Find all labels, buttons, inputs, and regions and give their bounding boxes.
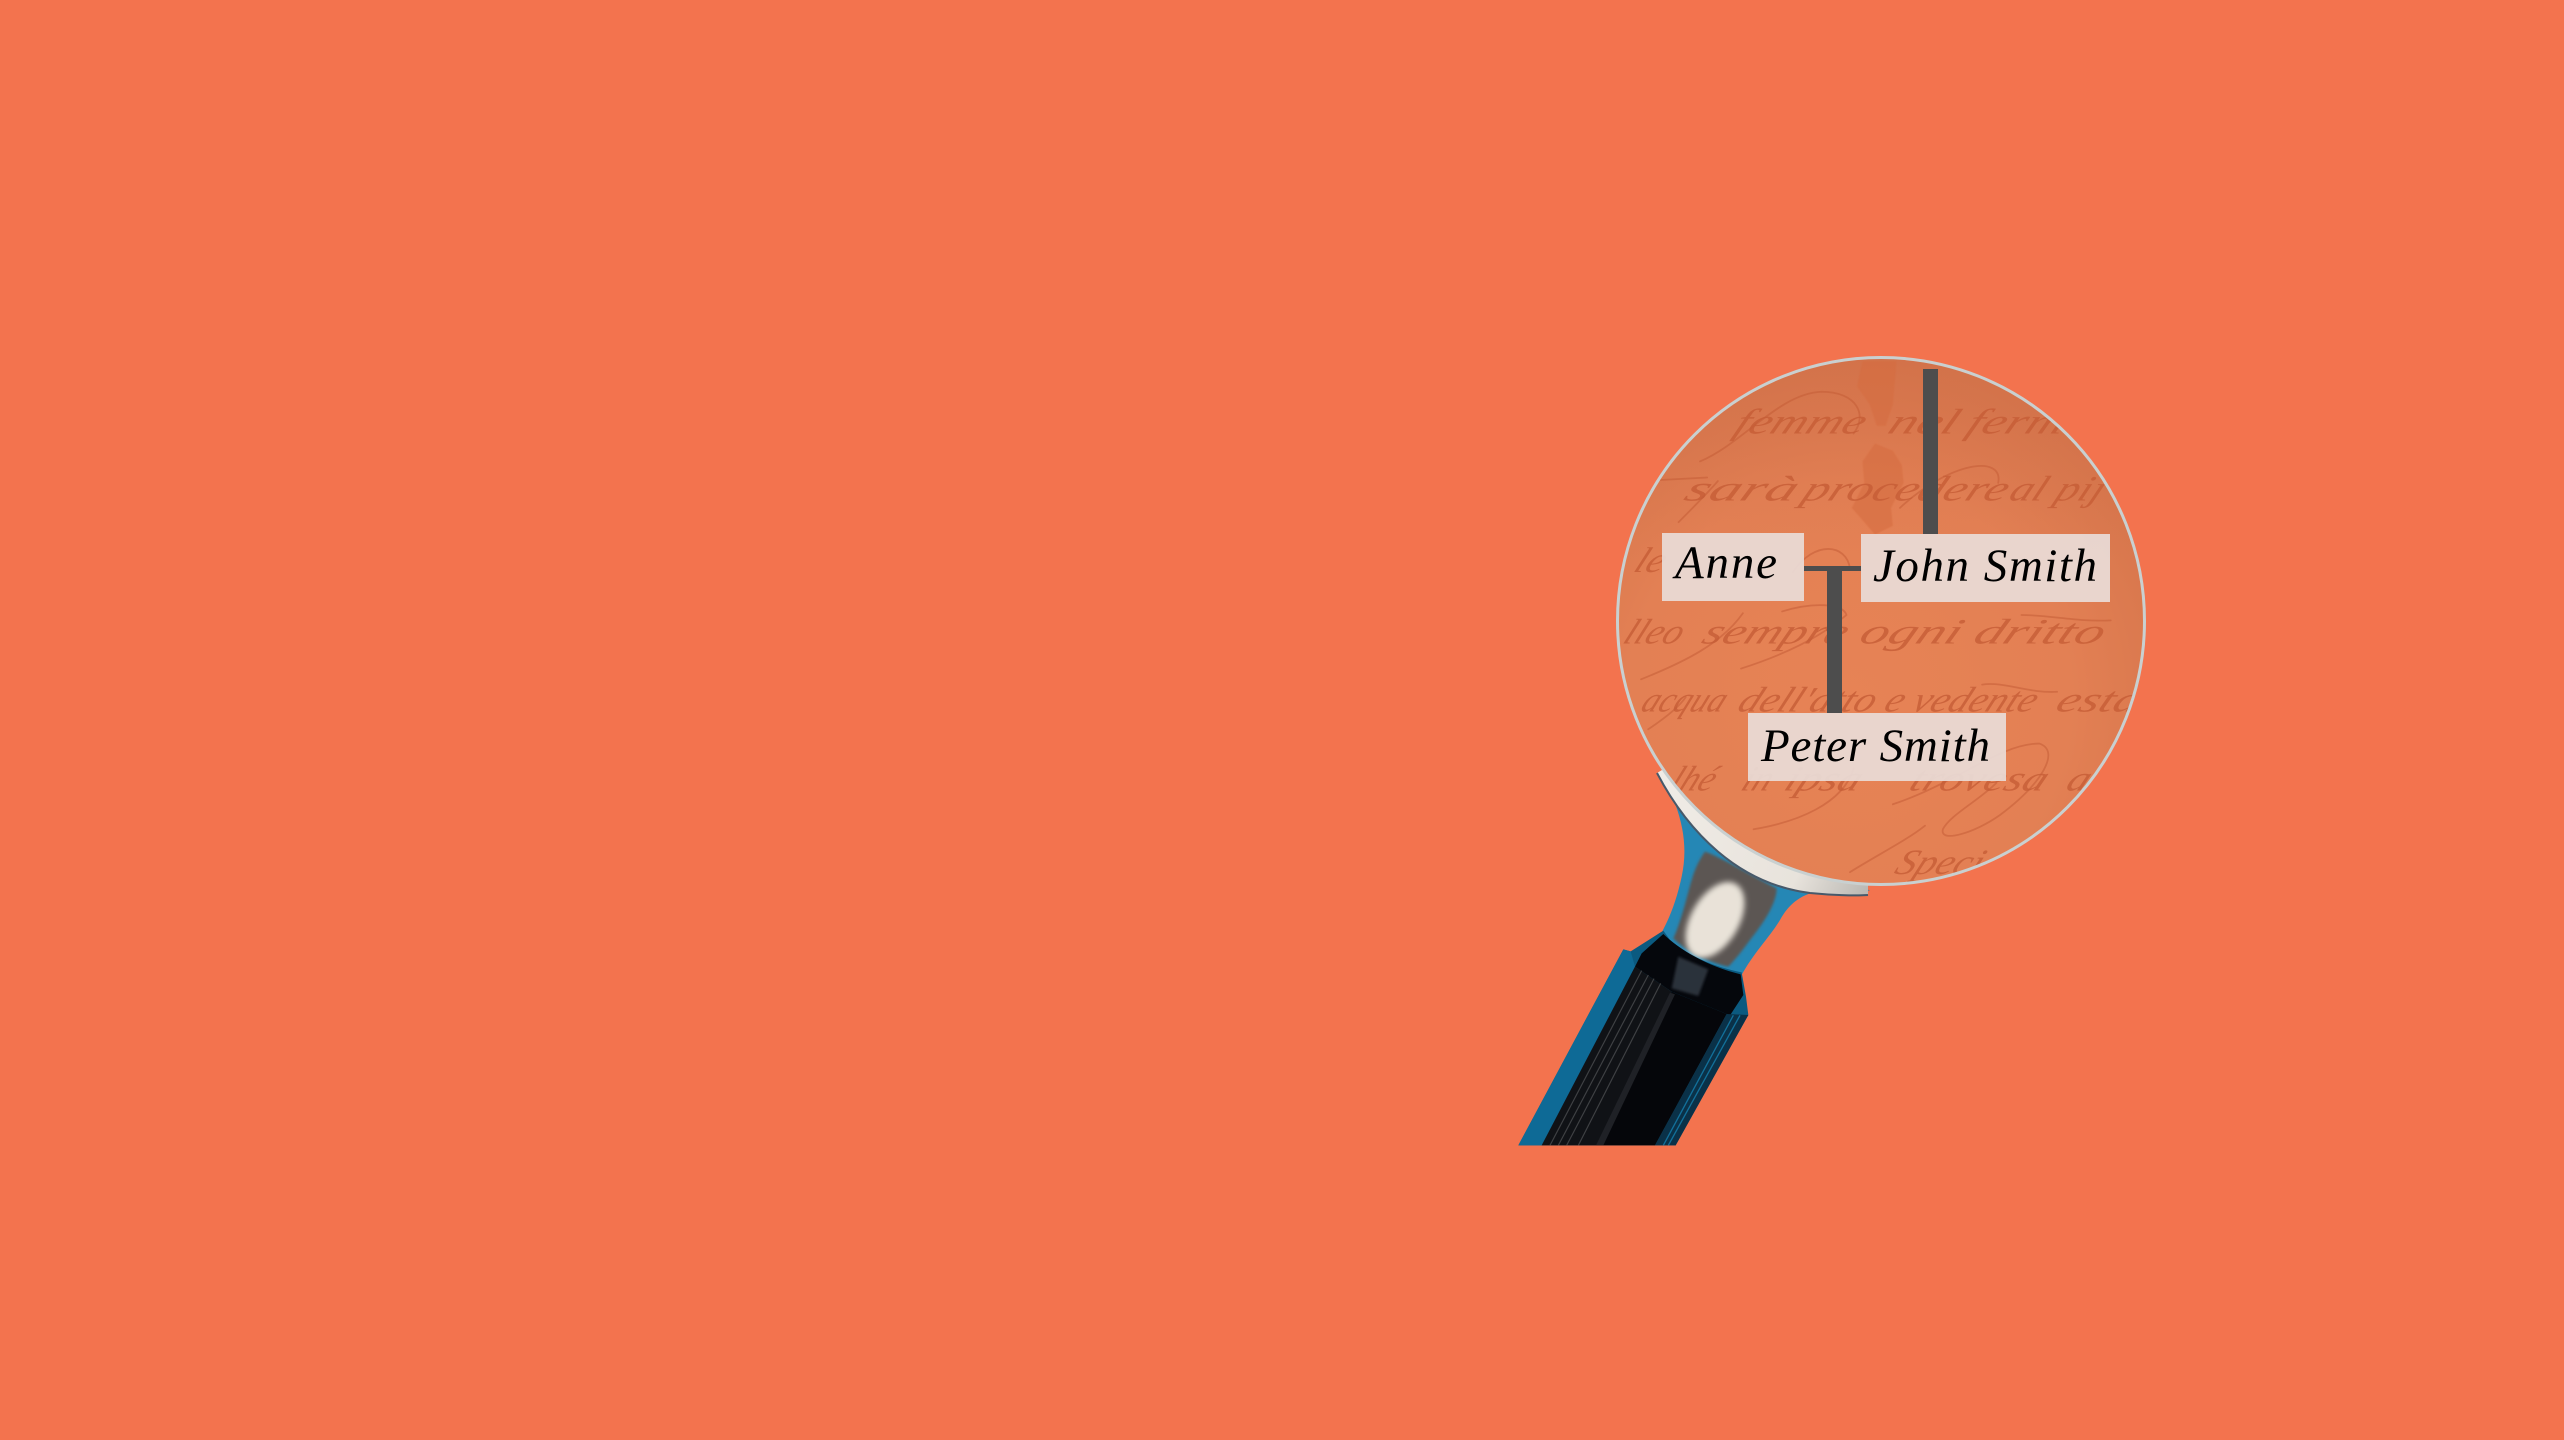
connector: line from above to John Smith <box>1923 369 1938 534</box>
manuscript page inside the lens <box>1618 361 2149 883</box>
handwriting: procedere <box>1792 470 2017 509</box>
connector: line down to Peter Smith <box>1827 571 1842 713</box>
handwriting: esta <box>2050 681 2149 720</box>
name label: Anne <box>1662 533 1804 601</box>
magnifying glass handle <box>1518 803 1870 1145</box>
handwriting <box>1618 403 2149 883</box>
connector: marriage line between Anne and John Smith <box>1804 566 1861 571</box>
handwriting: lhé <box>1664 760 1726 799</box>
name label: Peter Smith <box>1748 713 2006 781</box>
handwriting: trovesa <box>1903 760 2056 799</box>
name label: John Smith: John Smith <box>1873 540 2097 592</box>
illustration: magnifying glass over an old manuscript on an orange background <box>1518 356 2146 1146</box>
handwriting: in <box>1735 760 1781 799</box>
handwriting: acqua <box>1635 681 1735 720</box>
handwriting: e vedente <box>1878 681 2046 720</box>
handwriting: sempre <box>1696 613 1856 652</box>
metal ferrule with highlight <box>1673 852 1777 968</box>
water stains <box>1852 421 1903 534</box>
lens rim <box>1618 358 2144 884</box>
lens rim lower crescent <box>1657 767 1868 895</box>
handle body <box>1518 931 1748 1145</box>
family tree <box>1662 369 2110 781</box>
handwriting: ferm <box>1960 403 2074 442</box>
handwriting: sarà <box>1678 470 1806 509</box>
handwriting: a <box>2060 760 2099 799</box>
handwriting: Specie <box>1889 843 2010 883</box>
handwriting: al pij <box>2003 470 2114 509</box>
handwriting: femme <box>1728 403 1874 442</box>
pen flourishes <box>1641 392 2111 872</box>
handwriting: nel <box>1882 403 1967 442</box>
name label: Anne: Anne <box>1672 537 1777 589</box>
name label: John Smith <box>1861 534 2110 602</box>
handwriting: lleo <box>1618 613 1692 652</box>
name label: Peter Smith: Peter Smith <box>1760 720 1990 772</box>
handwriting: ipsa <box>1778 760 1871 799</box>
lens <box>1618 358 2149 884</box>
handwriting: dritto <box>1968 613 2114 652</box>
handwriting: dell'atto <box>1732 681 1885 720</box>
handwriting: ogni <box>1853 613 1971 652</box>
handwriting: le <box>1628 542 1674 581</box>
handle neck in blue <box>1663 803 1870 975</box>
